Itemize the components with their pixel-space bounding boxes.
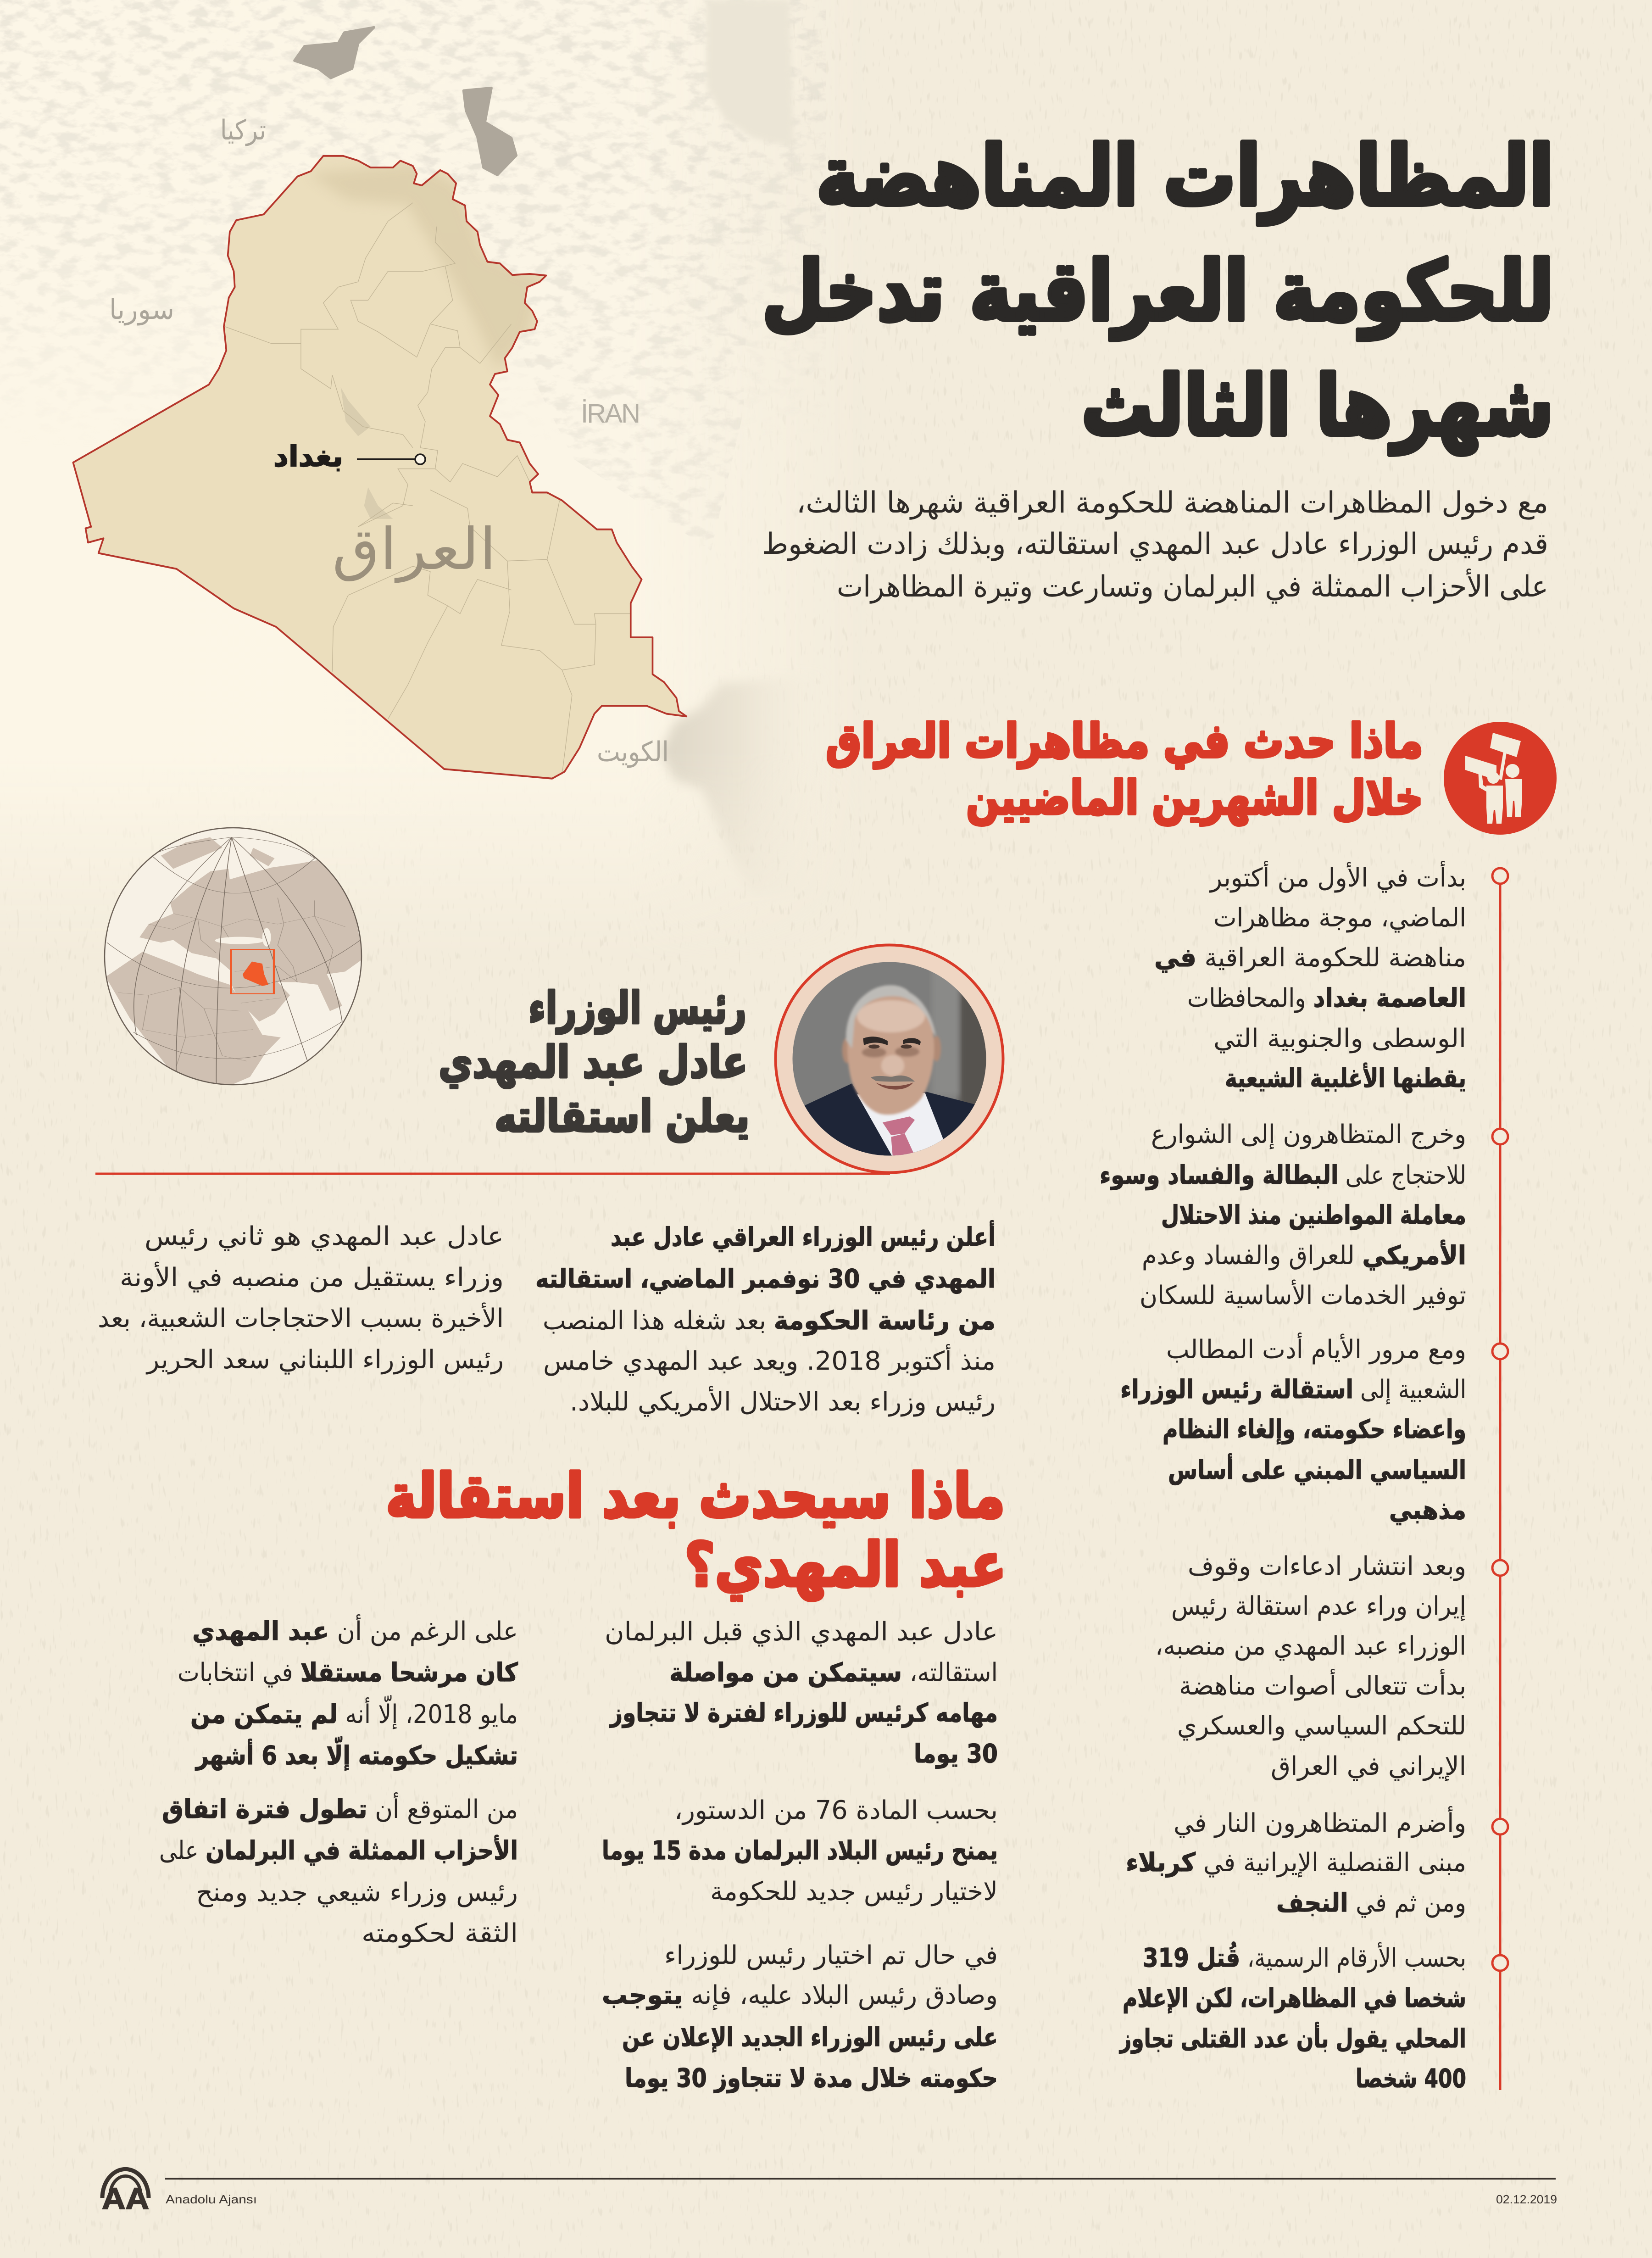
timeline text: october start	[1154, 861, 1466, 1093]
timeline text: casualties: 400 شخصا	[1356, 2064, 1466, 2094]
logo: anadolu agency: AA	[102, 2181, 149, 2215]
text: second prime minister: الأخيرة بسبب الاحتجاجات الشعبية، بعد	[98, 1302, 504, 1333]
text: resignation announcement: أعلن رئيس الوزراء العراقي عادل عبد	[611, 1220, 996, 1252]
text: caretaker	[605, 1617, 998, 1769]
heading: what will happen: عبد المهدي؟	[684, 1530, 1007, 1601]
text: second prime minister: عادل عبد المهدي هو ثاني رئيس	[145, 1221, 504, 1251]
footer	[102, 2169, 1557, 2215]
text: forming government: حكومته خلال مدة لا تتجاوز 30 يوما	[625, 2063, 998, 2093]
intro text: على الأحزاب الممثلة في البرلمان وتسارعت وتيرة المظاهرات	[837, 568, 1548, 604]
timeline text: consulate fire: وأضرم المتظاهرون النار في	[1174, 1806, 1466, 1838]
title	[762, 128, 1554, 455]
text: second prime minister: وزراء يستقيل من منصبه في الأونة	[120, 1261, 504, 1293]
timeline text: protesters to the streets: معاملة المواطنين منذ الاحتلال	[1161, 1200, 1466, 1230]
heading: prime minister resigns: رئيس الوزراء	[528, 982, 746, 1034]
timeline text: october start: يقطنها الأغلبية الشيعية	[1225, 1062, 1466, 1093]
heading: prime minister resigns: يعلن استقالته	[495, 1091, 750, 1142]
terrain relief	[0, 0, 826, 597]
timeline text: demands: الشعبية إلى استقالة رئيس الوزراء	[1120, 1375, 1466, 1405]
timeline text: protesters to the streets: وخرج المتظاهرون إلى الشوارع	[1151, 1120, 1466, 1150]
timeline text: iran: بدأت تتعالى أصوات مناهضة	[1179, 1669, 1466, 1701]
intro text	[762, 486, 1548, 604]
text: independent candidate: تشكيل حكومته إلّا بعد 6 أشهر	[195, 1736, 518, 1771]
text: caretaker: استقالته، سيتمكن من مواصلة	[669, 1658, 998, 1688]
timeline text: iran: الوزراء عبد المهدي من منصبه،	[1155, 1631, 1466, 1661]
text: independent candidate: على الرغم من أن عبد المهدي	[192, 1614, 518, 1646]
text: independent candidate	[178, 1614, 518, 1771]
heading: what happened: ماذا حدث في مظاهرات العراق	[826, 714, 1423, 769]
timeline text: october start: الماضي، موجة مظاهرات	[1213, 903, 1466, 933]
globe grid	[107, 837, 361, 1085]
timeline text: protesters to the streets: توفير الخدمات الأساسية للسكان	[1140, 1279, 1466, 1310]
text: second prime minister	[98, 1221, 504, 1375]
text: forming government: في حال تم اختيار رئيس للوزراء	[664, 1940, 998, 1970]
timeline text: protesters to the streets: الأمريكي للعراق والفساد وعدم	[1142, 1239, 1466, 1271]
timeline text: protesters to the streets: للاحتجاج على البطالة والفساد وسوء	[1100, 1160, 1466, 1190]
timeline text: consulate fire	[1126, 1806, 1466, 1918]
portrait	[775, 945, 1003, 1173]
label: iran: İRAN	[581, 399, 640, 429]
red divider line	[95, 1173, 890, 1175]
logo: anadolu agency	[102, 2169, 149, 2215]
label: turkey: تركيا	[220, 114, 266, 146]
text: article 76	[602, 1795, 998, 1907]
text: caretaker: عادل عبد المهدي الذي قبل البرلمان	[605, 1617, 998, 1647]
iraq highlight on globe	[231, 949, 274, 994]
timeline text: iran: للتحكم السياسي والعسكري	[1177, 1711, 1466, 1741]
timeline text: october start: بدأت في الأول من أكتوبر	[1209, 861, 1466, 893]
text: article 76: بحسب المادة 76 من الدستور،	[674, 1795, 998, 1825]
province borders	[225, 203, 631, 775]
heading: prime minister resigns: عادل عبد المهدي	[439, 1037, 748, 1088]
lake van and lake urmia	[295, 28, 516, 175]
timeline text: october start: مناهضة للحكومة العراقية في	[1154, 943, 1466, 973]
label: syria: سوريا	[109, 294, 174, 326]
text: article 76: لاختيار رئيس جديد للحكومة	[710, 1877, 998, 1907]
globe outline	[105, 828, 362, 1085]
icon: protesters	[1444, 722, 1557, 835]
map: iraq	[73, 114, 686, 779]
intro text: قدم رئيس الوزراء عادل عبد المهدي استقالته، وبذلك زادت الضغوط	[762, 527, 1548, 561]
heading: what happened: خلال الشهرين الماضيين	[966, 771, 1423, 825]
timeline text: consulate fire: مبنى القنصلية الإيرانية في كربلاء	[1126, 1848, 1466, 1878]
text: independent candidate: كان مرشحا مستقلا في انتخابات	[178, 1658, 518, 1688]
timeline text: iran: وبعد انتشار ادعاءات وقوف	[1188, 1551, 1466, 1581]
timeline text: demands: ومع مرور الأيام أدت المطالب	[1166, 1332, 1466, 1365]
timeline text: october start: الوسطى والجنوبية التي	[1213, 1024, 1466, 1054]
heading: what happened	[826, 714, 1423, 825]
persian gulf shading	[661, 675, 826, 895]
heading: what will happen	[386, 1461, 1007, 1601]
text: forming government: وصادق رئيس البلاد عليه، فإنه يتوجب	[602, 1980, 998, 2011]
timeline text: casualties	[1119, 1942, 1466, 2094]
text: resignation announcement	[535, 1220, 996, 1417]
globe locator	[105, 828, 364, 1086]
text: resignation announcement: من رئاسة الحكومة بعد شغله هذا المنصب	[543, 1306, 996, 1336]
timeline text: iran: إيران وراء عدم استقالة رئيس	[1171, 1591, 1466, 1622]
label: baghdad with leader: بغداد	[273, 440, 343, 473]
text: expected delay: من المتوقع أن تطول فترة اتفاق	[162, 1792, 518, 1824]
timeline text: october start: العاصمة بغداد والمحافظات	[1187, 983, 1466, 1013]
text: expected delay: الأحزاب الممثلة في البرلمان على	[159, 1834, 518, 1866]
agency name: Anadolu Ajansı	[166, 2192, 257, 2206]
timeline text: protesters to the streets	[1100, 1120, 1466, 1310]
text: caretaker: 30 يوما	[914, 1739, 998, 1769]
label: kuwait: الكويت	[597, 736, 669, 768]
text: resignation announcement: منذ أكتوبر 2018. ويعد عبد المهدي خامس	[543, 1344, 996, 1376]
text: resignation announcement: رئيس وزراء بعد الاحتلال الأمريكي للبلاد.	[570, 1386, 996, 1417]
label: iraq: العراق	[332, 516, 496, 583]
map background	[0, 0, 826, 876]
salt lakes	[341, 387, 393, 519]
text: forming government	[602, 1940, 998, 2093]
heading: prime minister resigns	[439, 982, 750, 1142]
text: expected delay: رئيس وزراء شيعي جديد ومنح	[196, 1878, 518, 1907]
date: 02.12.2019	[1496, 2192, 1557, 2206]
title: المظاهرات المناهضة	[816, 128, 1554, 225]
kurdistan relief shading	[308, 163, 542, 369]
timeline text: consulate fire: ومن ثم في النجف	[1276, 1888, 1466, 1918]
text: forming government: على رئيس الوزراء الجديد الإعلان عن	[622, 2023, 998, 2052]
heading: what will happen: ماذا سيحدث بعد استقالة	[386, 1461, 1005, 1532]
timeline text: demands: السياسي المبني على أساس	[1168, 1453, 1466, 1485]
timeline text: demands: واعضاء حكومته، وإلغاء النظام	[1163, 1415, 1466, 1444]
timeline text: casualties: بحسب الأرقام الرسمية، قُتل 319	[1143, 1942, 1466, 1973]
text: article 76: يمنح رئيس البلاد البرلمان مدة 15 يوما	[602, 1836, 998, 1866]
caspian sea shading	[706, 0, 794, 147]
iraq border	[73, 156, 686, 779]
globe land	[106, 837, 364, 1086]
timeline text: iran: الإيراني في العراق	[1271, 1751, 1466, 1781]
timeline text: casualties: شخصا في المظاهرات، لكن الإعلام	[1123, 1984, 1466, 2013]
timeline text: demands	[1120, 1332, 1466, 1525]
timeline text: demands: مذهبي	[1389, 1495, 1466, 1525]
intro text: مع دخول المظاهرات المناهضة للحكومة العراقية شهرها الثالث،	[796, 486, 1548, 520]
timeline text: iran	[1155, 1551, 1466, 1781]
label: baghdad with leader	[273, 440, 425, 473]
title: شهرها الثالث	[1081, 358, 1554, 455]
text: expected delay	[159, 1792, 518, 1948]
iraq land fill	[73, 156, 686, 779]
text: independent candidate: مايو 2018، إلّا أنه لم يتمكن من	[190, 1695, 518, 1730]
timeline	[1492, 868, 1508, 2090]
globe country borders	[118, 898, 345, 1066]
text: caretaker: مهامه كرئيس للوزراء لفترة لا تتجاوز	[609, 1698, 998, 1728]
timeline text: casualties: المحلي يقول بأن عدد القتلى تجاوز	[1119, 2022, 1466, 2054]
text: second prime minister: رئيس الوزراء اللبناني سعد الحرير	[145, 1345, 504, 1375]
text: resignation announcement: المهدي في 30 نوفمبر الماضي، استقالته	[535, 1264, 996, 1294]
text: expected delay: الثقة لحكومته	[362, 1918, 518, 1948]
